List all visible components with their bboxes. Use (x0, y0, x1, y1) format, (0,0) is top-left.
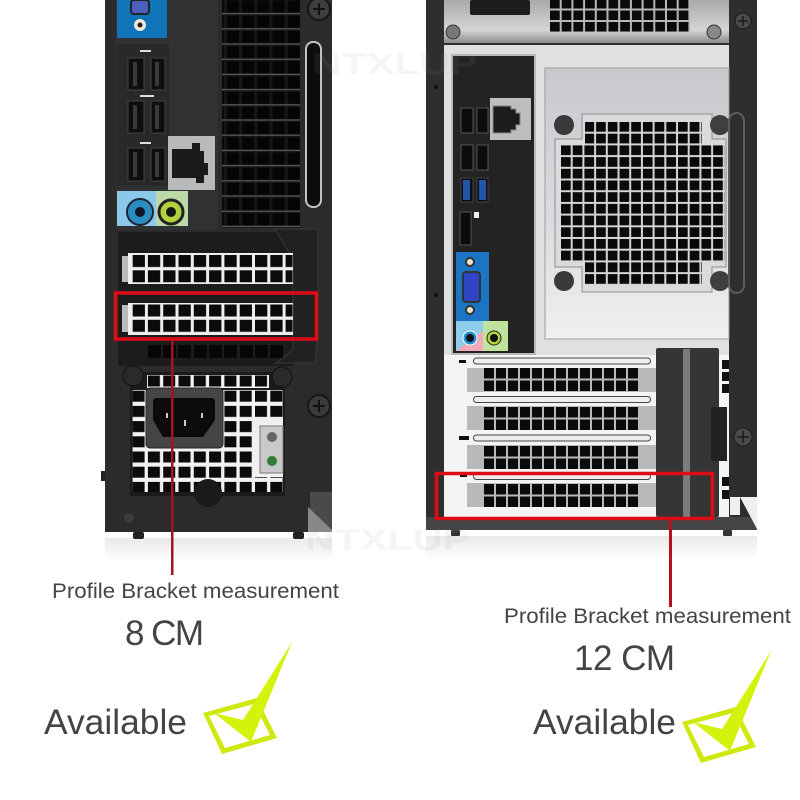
side vents (722, 360, 729, 499)
text: right size: 12 CM (574, 639, 675, 678)
expansion slots (459, 358, 656, 507)
I/O plate (116, 0, 218, 230)
icon: right check mark (682, 651, 771, 763)
audio jacks (117, 191, 188, 226)
bottom corner (730, 497, 757, 529)
text: left size: 8 CM (125, 614, 204, 653)
slot bay (118, 232, 293, 366)
audio jacks (456, 321, 508, 351)
watermark (305, 48, 477, 557)
screw (308, 0, 330, 20)
reflection (105, 538, 332, 562)
blank slot vents (148, 345, 283, 358)
power supply top (444, 0, 751, 43)
watermark: NTXLUP (312, 48, 477, 81)
panel: tower PC rear (426, 0, 757, 560)
power supply (123, 366, 292, 507)
bracket upper (122, 253, 293, 284)
feet (451, 530, 460, 536)
retention arm (656, 348, 727, 517)
slot cover arm (275, 229, 318, 363)
power socket (146, 388, 223, 448)
handle (729, 113, 744, 293)
feet (133, 532, 144, 539)
vent grid (222, 0, 300, 228)
text: right available: Available (533, 703, 676, 742)
I/O plate (452, 55, 535, 354)
watermark: NTXLUP (305, 524, 470, 557)
LAN port (490, 98, 531, 140)
reflection (426, 536, 757, 560)
chassis dots (434, 85, 438, 297)
VGA port (456, 252, 489, 321)
bottom corner (308, 492, 332, 532)
text: left measurement label: Profile Bracket measurement (52, 580, 339, 603)
chassis body (426, 0, 757, 530)
bracket lower (122, 303, 293, 335)
panel: small form factor PC rear (101, 0, 332, 562)
side screw (308, 395, 330, 417)
callout: red box 12 cm (436, 474, 712, 607)
LAN port (168, 136, 215, 190)
handle (306, 42, 321, 207)
side panel with fan (545, 68, 730, 339)
white back panel (444, 45, 729, 517)
text: left available: Available (44, 703, 187, 742)
chassis body (105, 0, 332, 532)
icon: left check mark (203, 642, 292, 754)
bottom strip (426, 517, 757, 530)
corner screw (124, 513, 134, 523)
text: right measurement label: Profile Bracket measurement (504, 605, 791, 628)
side screw (734, 428, 752, 446)
LED block (253, 417, 283, 477)
fan plate (555, 114, 726, 292)
callout: red box 8 cm (116, 293, 316, 575)
